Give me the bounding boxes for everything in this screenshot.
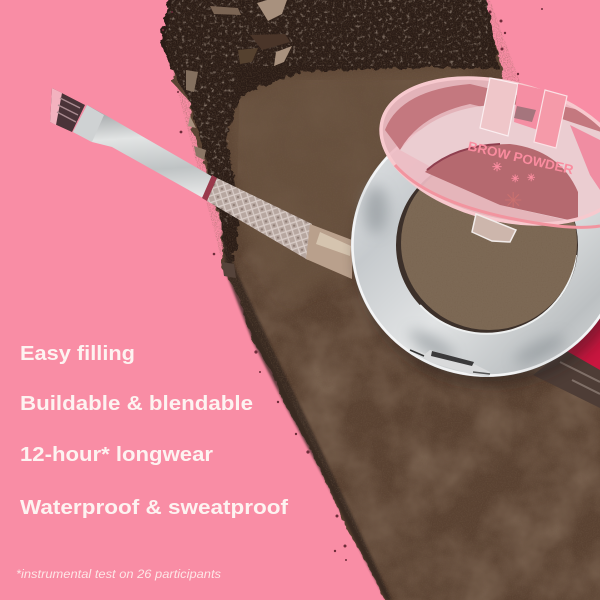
translucent lid xyxy=(379,76,600,243)
compact xyxy=(351,113,600,386)
lid lower rim tint xyxy=(395,165,600,227)
lid contents xyxy=(385,84,600,230)
lid star icons: ✳ xyxy=(527,173,536,184)
lid lower tab xyxy=(472,214,516,242)
benefit 4: Waterproof & sweatproof xyxy=(20,497,288,519)
lid rim xyxy=(366,54,600,248)
ferrule highlight xyxy=(73,105,104,142)
handle end shine xyxy=(316,232,351,256)
brush bristles xyxy=(50,88,85,132)
ferrule collar xyxy=(202,175,217,201)
grain texture xyxy=(165,0,600,600)
crumb texture xyxy=(164,0,488,228)
lid right pink xyxy=(570,125,600,190)
brown powder pan xyxy=(401,156,577,330)
swatch base xyxy=(160,0,600,600)
ring mottling xyxy=(364,186,569,369)
silver ring xyxy=(351,113,600,377)
compact hinge xyxy=(410,347,490,377)
pink window over powder xyxy=(425,144,578,222)
lid frosted centre xyxy=(400,105,600,230)
lid star icons: ✳ xyxy=(492,160,502,174)
benefit 1: Easy filling xyxy=(20,343,135,365)
lid star icons xyxy=(492,160,536,185)
pan texture xyxy=(401,156,577,330)
lid embossed asterisk: ✳ xyxy=(504,188,522,213)
benefit 2: Buildable & blendable xyxy=(20,393,253,415)
pan highlight edge xyxy=(420,255,576,334)
lid brand text: BROW POWDER xyxy=(466,138,576,177)
pan window dark arc xyxy=(427,144,500,170)
benefit 3: 12-hour* longwear xyxy=(20,444,213,466)
scattered crumbs xyxy=(162,8,543,561)
benefits list xyxy=(20,343,288,519)
handle lower flecks xyxy=(560,362,600,394)
brush ferrule xyxy=(73,105,213,198)
ring rim highlight xyxy=(352,114,600,376)
lid clasp xyxy=(480,78,567,148)
pale flakes xyxy=(186,0,292,278)
pan well shadow xyxy=(396,156,578,334)
clear handle end xyxy=(306,224,352,279)
dark crumbled top band xyxy=(160,0,499,268)
lid body xyxy=(364,53,600,249)
lid star icons: ✳ xyxy=(511,174,520,185)
swatch smooth centre xyxy=(228,65,480,300)
footnote: *instrumental test on 26 participants xyxy=(16,569,221,581)
dark pink panel behind compact xyxy=(560,300,600,372)
dark left edge xyxy=(222,230,392,600)
knurled clear handle xyxy=(207,178,312,260)
powder swatch xyxy=(160,0,600,600)
brush xyxy=(50,88,600,408)
handle section below compact xyxy=(533,350,600,408)
compact shadow xyxy=(356,126,600,386)
swatch mottled highlights xyxy=(235,80,600,600)
lid upper rose crescent xyxy=(385,84,600,150)
